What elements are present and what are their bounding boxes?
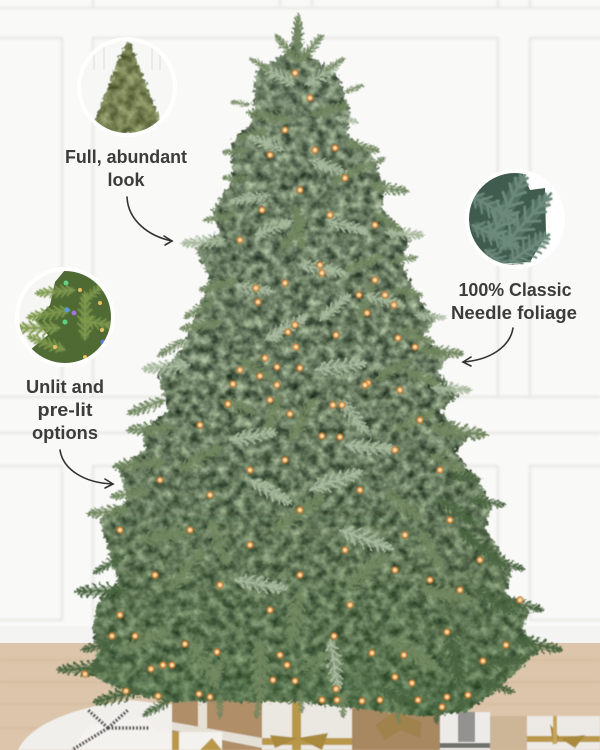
arrow: [127, 197, 172, 245]
callout: classic needle foliage: Needle foliage: [451, 303, 577, 323]
label: full, abundant look: Full, abundant: [65, 147, 187, 167]
callout: unlit and pre-lit options: pre-lit: [38, 400, 92, 420]
callout: full, abundant look: [65, 37, 187, 245]
white gift with gold ribbon: [262, 702, 352, 750]
left edge fronds: [222, 174, 250, 182]
wood floor: [0, 643, 600, 750]
right edge fronds: [344, 137, 381, 157]
label: 100% classic needle foliage: 100% Classic: [458, 280, 572, 300]
striped gift: [440, 712, 490, 750]
inset photo: needle foliage: [469, 171, 553, 267]
tree colour tint: [85, 15, 540, 716]
kraft and white gift far right: [490, 716, 600, 750]
treetop fronds: [292, 14, 304, 52]
arrow: [463, 328, 513, 366]
callout: classic needle foliage: [451, 167, 577, 366]
kraft gift right: [352, 708, 440, 750]
tree skirt: [18, 700, 175, 750]
kraft gift left: [172, 698, 262, 750]
string lights: [80, 68, 525, 712]
tree body texture: [85, 15, 540, 716]
arrow: [60, 450, 113, 488]
main tree: [57, 14, 563, 724]
interior lower fronds: [139, 522, 197, 548]
label: unlit and pre-lit options: Unlit and: [26, 377, 104, 397]
interior middle fronds: [314, 355, 368, 378]
callout: full, abundant look: look: [108, 170, 145, 190]
tree branches: [57, 14, 563, 724]
tree skirt and gifts: [18, 698, 600, 750]
front white gift: [70, 710, 222, 750]
callout: unlit and pre-lit options: [20, 267, 114, 489]
bottom fringe fronds: [216, 695, 224, 719]
interior upper fronds: [245, 131, 287, 156]
inset photo: lit branches: [20, 267, 111, 367]
callout: unlit and pre-lit options: options: [32, 423, 98, 443]
inset photo: full tree: [90, 37, 161, 133]
